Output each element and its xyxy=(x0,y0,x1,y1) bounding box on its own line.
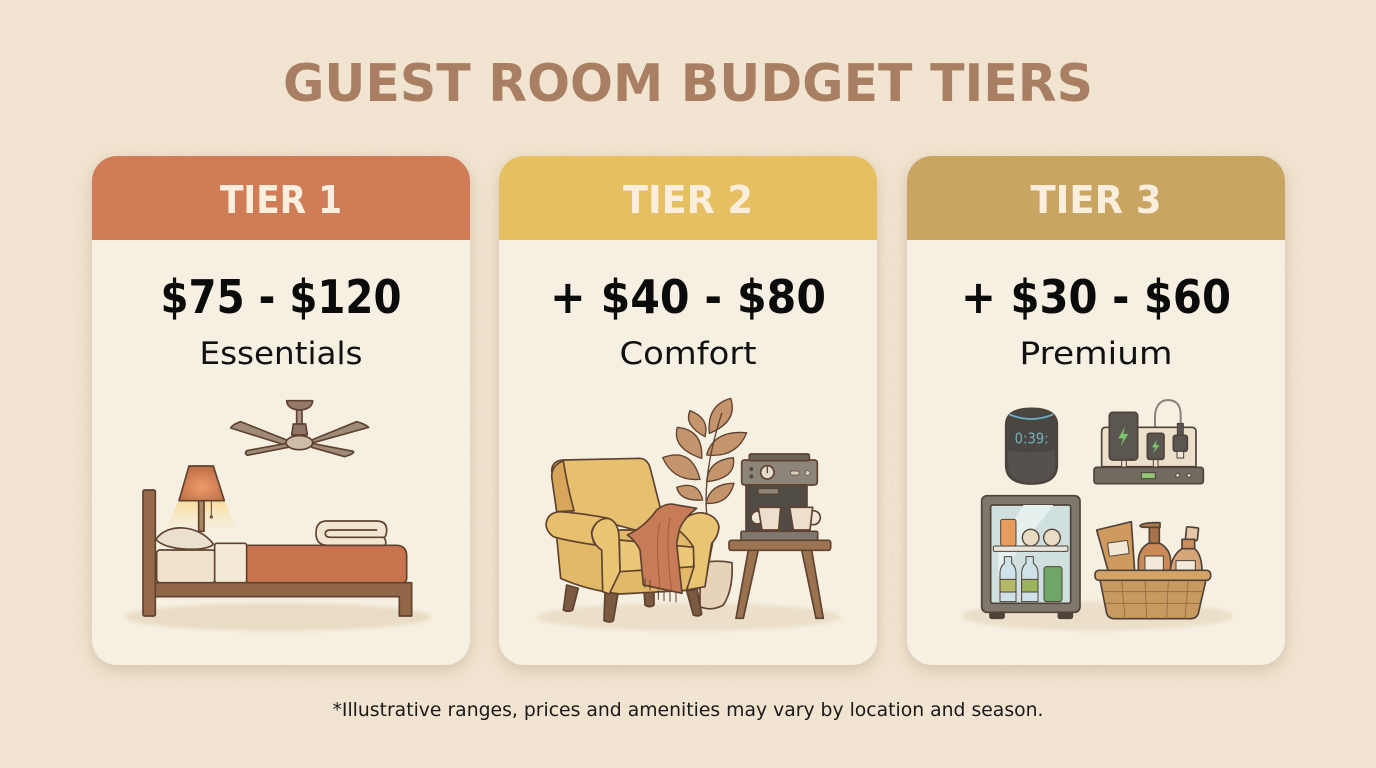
tier 3 header xyxy=(907,156,1285,240)
charging station xyxy=(1094,400,1203,484)
mini fridge xyxy=(982,496,1080,618)
tier 1 name: Essentials xyxy=(200,336,362,372)
illustration: armchair, plant and coffee machine xyxy=(536,398,841,631)
tier 2 header xyxy=(499,156,877,240)
panel: tier 2 comfort xyxy=(499,156,877,665)
smart speaker xyxy=(1006,408,1057,484)
smart speaker: 0:39: xyxy=(1015,429,1049,447)
tier 2 name: Comfort xyxy=(620,336,756,372)
title: GUEST ROOM BUDGET TIERS xyxy=(283,54,1093,114)
tier 3 price: + $30 - $60 xyxy=(961,270,1231,324)
tier 1 header xyxy=(92,156,470,240)
tier 2 price: + $40 - $80 xyxy=(550,270,826,324)
tier 3 header: TIER 3 xyxy=(1030,178,1162,222)
panel: tier 1 essentials xyxy=(92,156,470,665)
tier 1 price: $75 - $120 xyxy=(160,270,402,324)
tier 1 header: TIER 1 xyxy=(220,178,342,222)
tier 3 name: Premium xyxy=(1020,336,1172,372)
tier 2 header: TIER 2 xyxy=(623,178,753,222)
illustration: smart speaker, charger, mini fridge and toiletry basket xyxy=(961,400,1233,631)
panel: tier 3 premium xyxy=(907,156,1285,665)
illustration: bed, lamp and ceiling fan xyxy=(125,401,432,631)
footnote: *Illustrative ranges, prices and amenities may vary by location and season. xyxy=(332,699,1044,721)
toiletry basket xyxy=(1095,522,1211,619)
